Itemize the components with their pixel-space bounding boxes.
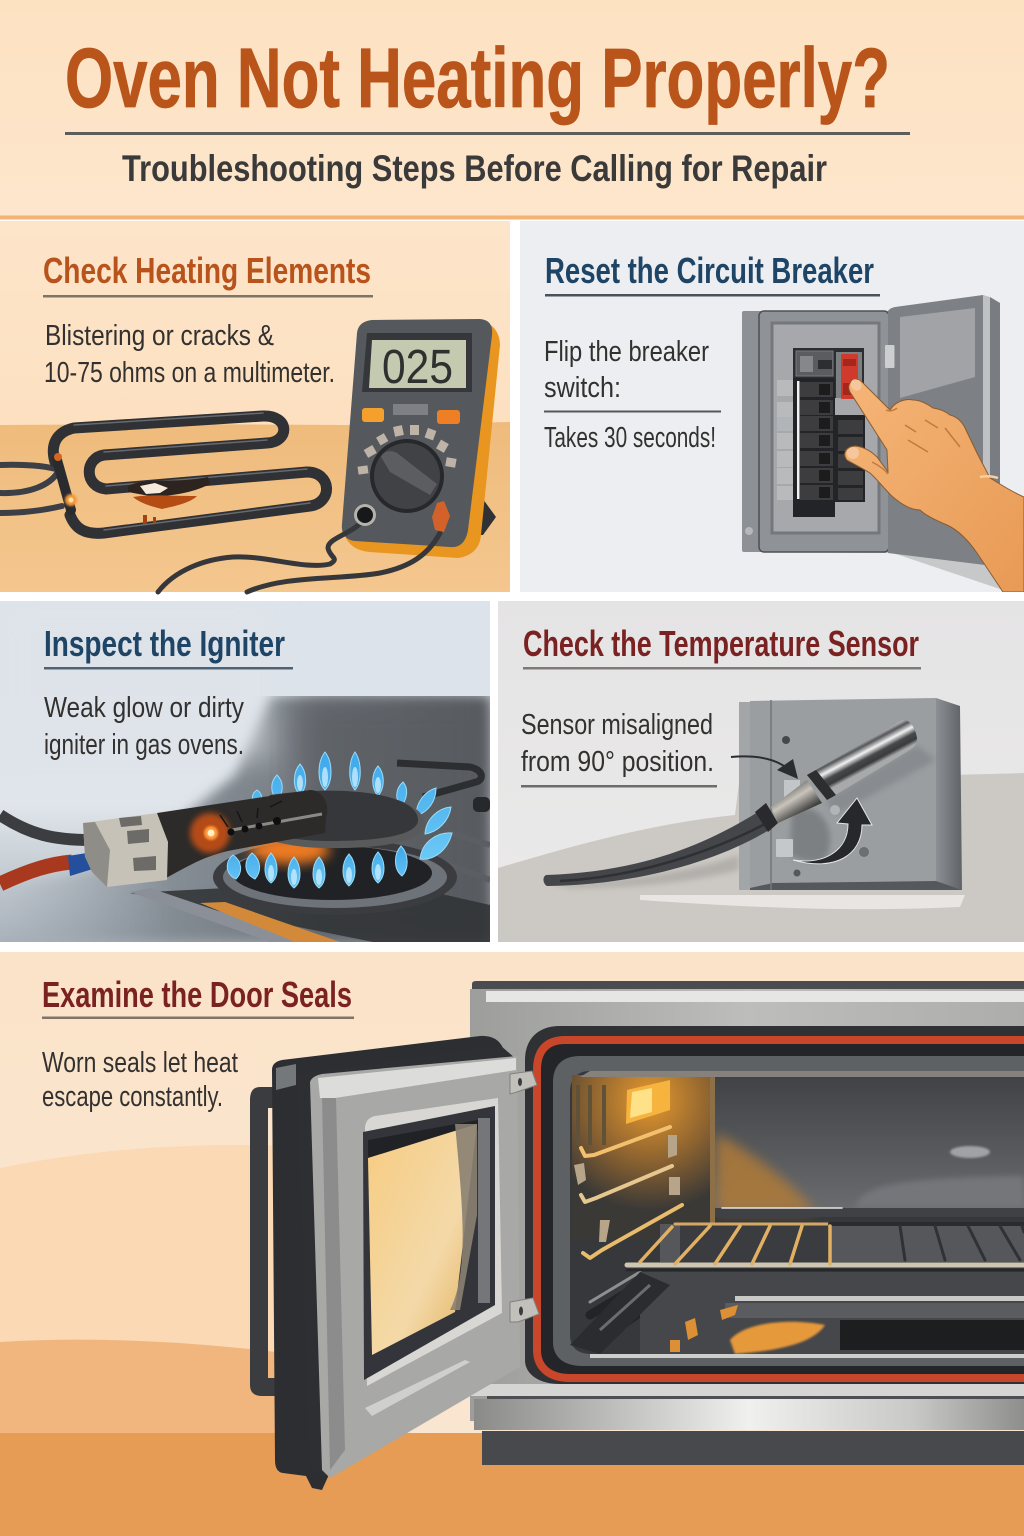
body text: igniter	[44, 692, 244, 761]
body text: door seals	[42, 1047, 238, 1113]
panel: check heating elements	[0, 221, 510, 592]
body text: sensor: from 90° position.	[521, 746, 714, 778]
body text: igniter: Weak glow or dirty	[44, 692, 244, 724]
red breaker switch	[841, 354, 858, 399]
heating element coil	[0, 413, 327, 533]
oven door	[250, 1036, 539, 1490]
body text: sensor	[521, 709, 717, 788]
lower cavity glow	[570, 1272, 1024, 1358]
panel: reset the circuit breaker	[520, 221, 1024, 592]
gas burner and grate	[130, 752, 490, 942]
multimeter display: 025	[382, 341, 453, 394]
multimeter	[158, 319, 500, 592]
panel: check the temperature sensor	[498, 601, 1024, 942]
oven cavity	[570, 1071, 1024, 1358]
heading: check heating elements: Check Heating Elements	[43, 250, 371, 291]
body text: door seals: Worn seals let heat	[42, 1047, 238, 1079]
body text: door seals: escape constantly.	[42, 1081, 223, 1113]
panel: inspect the igniter	[0, 601, 490, 942]
door hinges	[510, 1071, 539, 1322]
breaker panel box	[742, 295, 1024, 592]
oven rack	[627, 1208, 1024, 1270]
heading: inspect the igniter: Inspect the Igniter	[44, 623, 285, 664]
door handle	[250, 1087, 278, 1396]
door window	[363, 1098, 502, 1386]
subtitle: Troubleshooting Steps Before Calling for Repair	[122, 148, 827, 189]
hand	[845, 377, 1024, 592]
heading: reset the circuit breaker: Reset the Circuit Breaker	[545, 250, 874, 291]
red door gasket	[525, 1026, 1024, 1384]
body text: heating elements: 10-75 ohms on a multimeter.	[44, 357, 335, 389]
body text: sensor: Sensor misaligned	[521, 709, 713, 741]
oven body	[470, 981, 1024, 1465]
body text: breaker: Takes 30 seconds!	[544, 422, 716, 454]
header band	[0, 0, 1024, 220]
side rack supports	[581, 1127, 682, 1340]
breaker switches	[777, 348, 865, 517]
burner cap	[276, 800, 422, 848]
blue flames	[227, 752, 452, 888]
alignment pointer arrow	[731, 756, 798, 779]
heading: examine the door seals: Examine the Door Seals	[42, 974, 352, 1015]
sensor probe	[543, 720, 917, 888]
element burn damage	[54, 453, 210, 524]
body text: breaker	[544, 336, 721, 454]
probe leads	[158, 520, 440, 592]
body text: heating elements: Blistering or cracks &	[45, 320, 274, 352]
oven light glow	[626, 1080, 670, 1124]
igniter spark	[190, 813, 230, 853]
body text: heating elements	[44, 320, 335, 389]
body text: igniter: igniter in gas ovens.	[44, 729, 244, 761]
open panel door	[888, 295, 1000, 565]
sensor bracket	[739, 698, 962, 890]
panel: examine the door seals	[0, 952, 1024, 1536]
igniter probe and wires	[0, 790, 327, 887]
body text: breaker: Flip the breaker	[544, 336, 709, 368]
body text: breaker: switch:	[544, 372, 621, 404]
rotation arrow	[793, 798, 872, 864]
